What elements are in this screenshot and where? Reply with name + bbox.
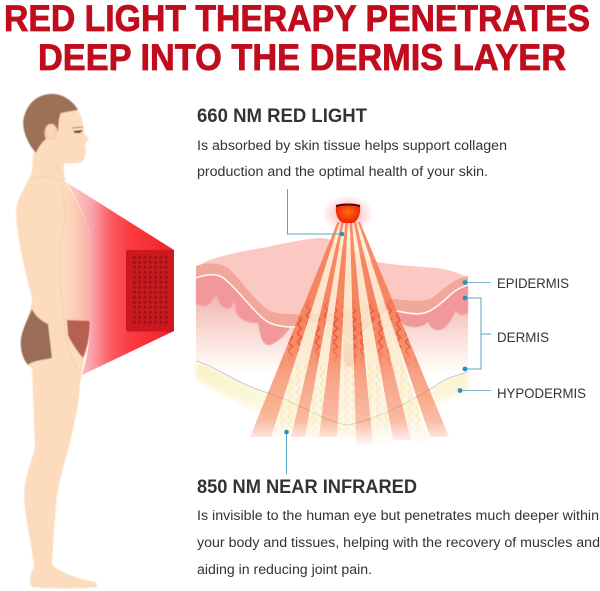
red light panel: [126, 250, 174, 332]
text block: 660 nm red light: production and the optimal health of your skin.: [197, 164, 488, 179]
text block: 850 nm near infrared: aiding in reducing joint pain.: [197, 562, 372, 577]
body silhouette: [16, 100, 97, 588]
layer labels: [497, 275, 586, 401]
underwear: [21, 309, 90, 365]
epidermis band: [196, 263, 468, 343]
660 nm red beams: [250, 222, 449, 445]
infrared beam zigzag texture: [272, 365, 428, 442]
red light cone: [66, 182, 174, 375]
central ridge: [343, 336, 358, 367]
text block: 660 nm red light: 660 NM RED LIGHT: [197, 106, 367, 127]
dermis layer: [196, 270, 468, 425]
callout line: 660 nm: [288, 189, 344, 236]
skin surface top: [196, 238, 468, 343]
hypodermis fat layer: [196, 362, 468, 438]
text block: 850 nm near infrared: [197, 477, 600, 577]
layer labels: EPIDERMIS: [497, 275, 569, 291]
rete ridges right: [396, 285, 468, 330]
arm and muscle shading: [34, 160, 78, 372]
text block: 850 nm near infrared: 850 NM NEAR INFRARED: [197, 477, 417, 498]
light beams: [250, 222, 449, 445]
human figure: [16, 94, 97, 588]
text block: 850 nm near infrared: your body and tissues, helping with the recovery of muscles and: [197, 535, 600, 550]
hair: [23, 94, 78, 153]
callout line: hypodermis: [458, 388, 491, 393]
torso red glow: [60, 182, 90, 345]
text block: 660 nm red light: [197, 106, 507, 179]
hypodermis boundary line: [196, 361, 468, 425]
850 nm infrared beams: [271, 222, 430, 445]
red light source: [322, 195, 374, 233]
text block: 660 nm red light: Is absorbed by skin tissue helps support collagen: [197, 138, 507, 153]
layer labels: HYPODERMIS: [497, 385, 586, 401]
ear: [46, 122, 56, 140]
title: [4, 0, 590, 78]
callout line: 850 nm: [284, 430, 289, 474]
title: DEEP INTO THE DERMIS LAYER: [38, 37, 566, 78]
callout line: epidermis: [463, 280, 491, 285]
layer labels: DERMIS: [497, 329, 549, 345]
callout bracket: dermis: [463, 296, 491, 371]
text block: 850 nm near infrared: Is invisible to the human eye but penetrates much deeper within: [197, 508, 599, 523]
red beam zigzag texture: [280, 298, 418, 365]
basement membrane white line: [196, 275, 468, 343]
eye and brow: [72, 127, 83, 133]
rete ridges left: [196, 275, 290, 345]
skin cross-section: [196, 238, 468, 438]
